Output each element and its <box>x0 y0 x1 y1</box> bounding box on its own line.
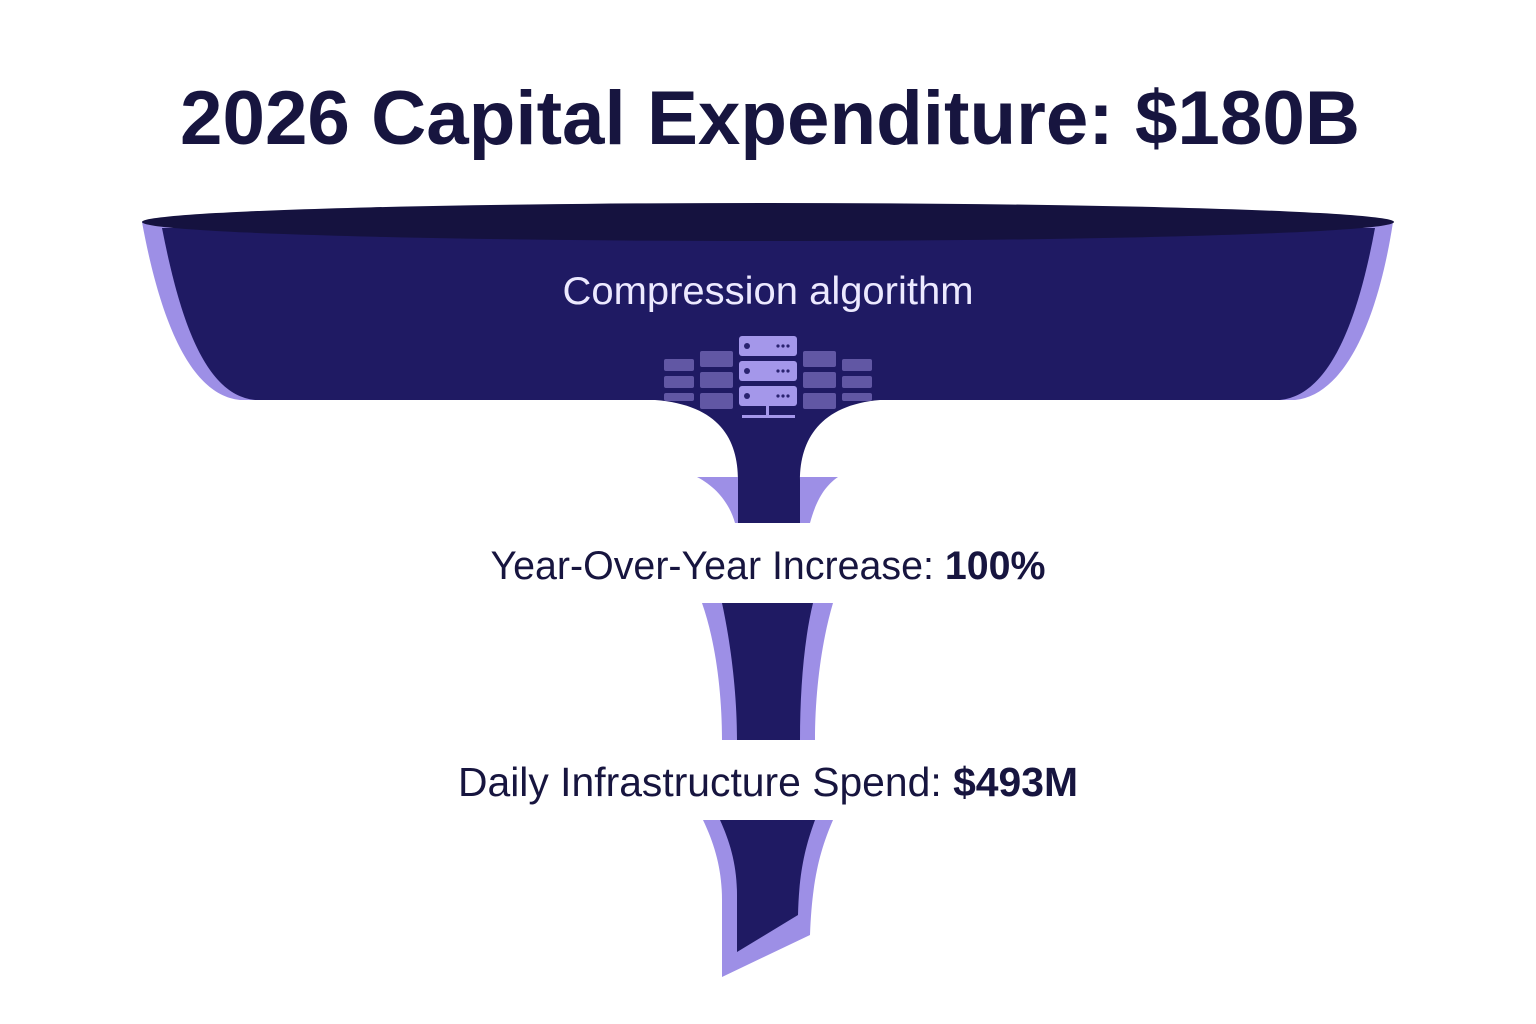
label: daily infrastructure spend: Daily Infrastructure Spend: $493M <box>458 759 1078 805</box>
funnel segment 3 <box>703 820 833 977</box>
funnel neck <box>655 400 880 523</box>
bowl label: Compression algorithm <box>562 270 974 313</box>
label: year-over-year increase: Year-Over-Year Increase: 100% <box>490 544 1046 588</box>
icon: server racks <box>664 336 872 418</box>
funnel top bowl <box>142 203 1394 523</box>
funnel segment 2 <box>702 603 833 740</box>
funnel neck flare <box>697 477 738 523</box>
title: 2026 Capital Expenditure: $180B <box>180 76 1360 161</box>
